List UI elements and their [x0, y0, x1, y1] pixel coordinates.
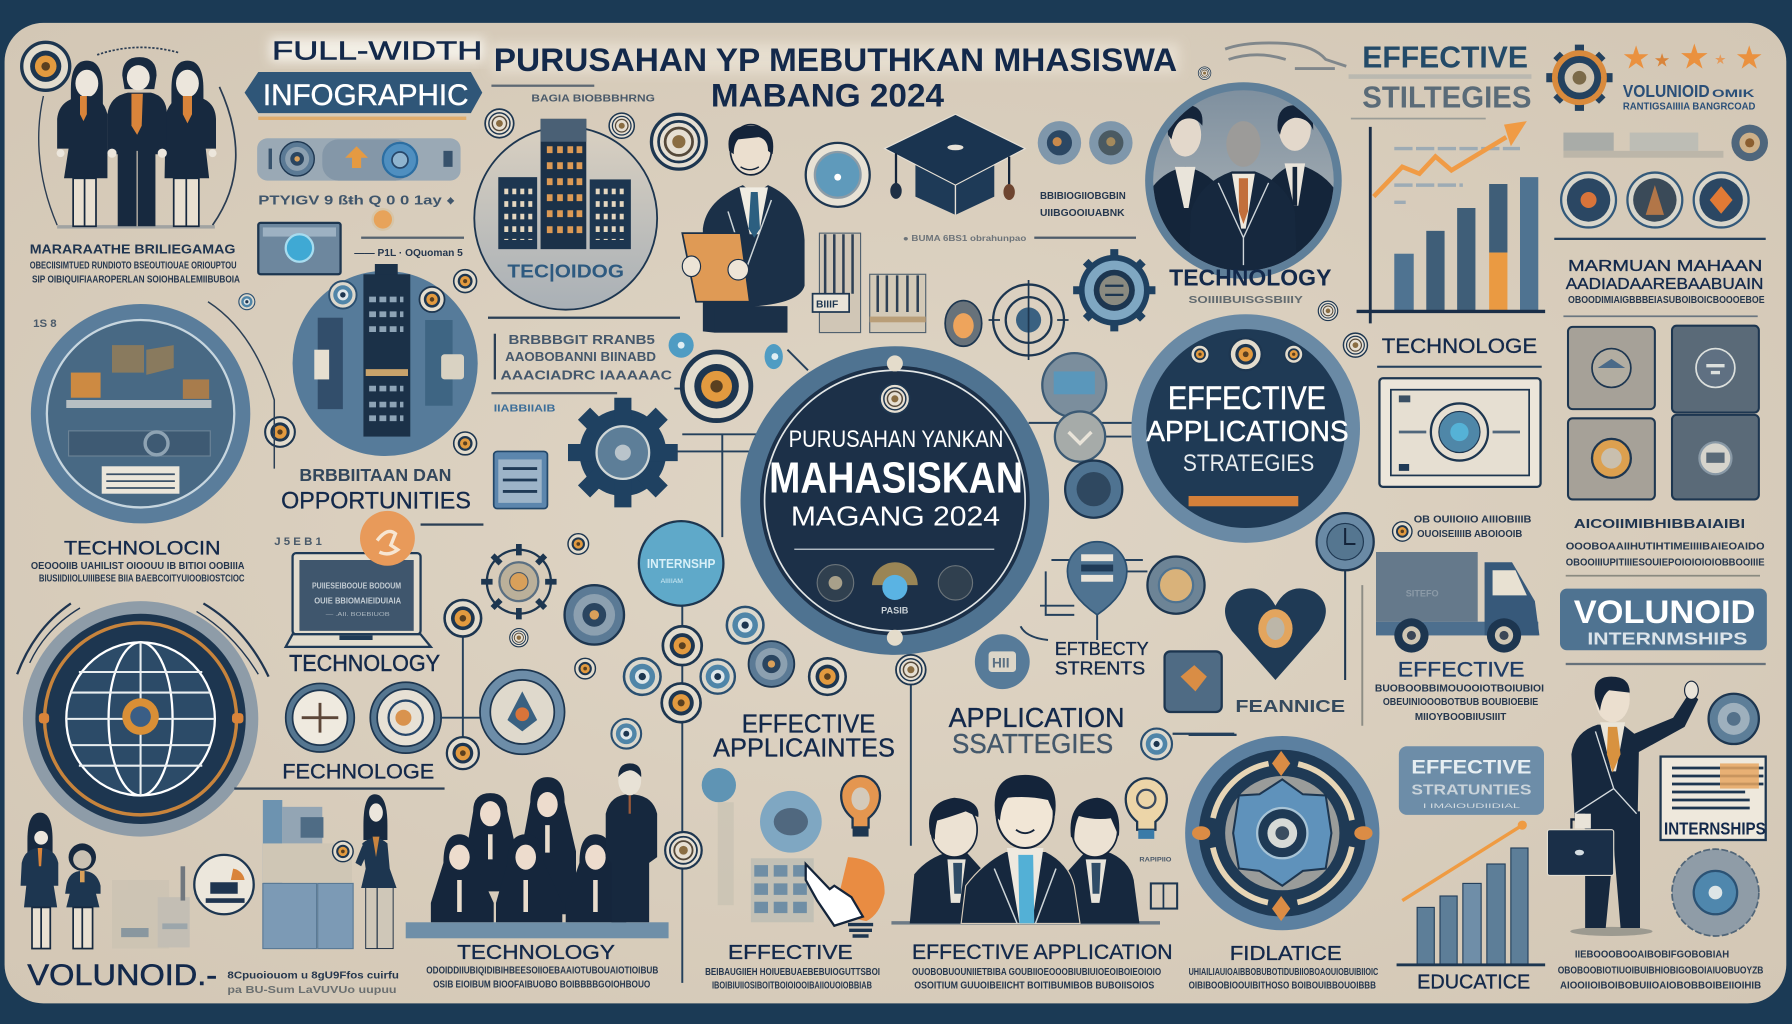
laptop: [286, 553, 431, 647]
orange bulb: [841, 776, 880, 837]
stars: ★: [1654, 49, 1670, 70]
internships document: [1661, 757, 1766, 840]
text block right: OBOODIMIAIGBBBEIASUBOIBOICBOOOEBOE: [1568, 295, 1765, 306]
volunoid caption top right: RANTIGSAIIIIA BANGRCOAD: [1623, 102, 1755, 113]
globe emblem: [17, 601, 269, 837]
heading: opportunities: OPPORTUNITIES: [281, 488, 471, 515]
heading: effective bottom: [705, 941, 880, 992]
twin badges and caption: [1034, 121, 1136, 239]
left man: [910, 798, 986, 923]
internships document: INTERNSHIPS: [1664, 818, 1766, 838]
laptop: OUIE BBIOMAIEIDUIAIA: [314, 596, 401, 605]
heading: technology team: SOIIIIBUISGSBIIIY: [1189, 295, 1303, 306]
building circle: TEC|OIDOG: [507, 261, 624, 282]
caption with rule: —— P1L · OQuoman 5: [354, 248, 463, 259]
barcodes: BIIIF: [816, 299, 838, 310]
compass gear: [480, 670, 565, 754]
camera panel: [1379, 378, 1541, 487]
heading: fidlatice: FIDLATICE: [1230, 942, 1342, 965]
bar chart top right: [1357, 121, 1545, 323]
target ring: [989, 280, 1069, 360]
ring orange large: [682, 352, 751, 421]
heading: effective application: OSOITIUM GUUOIBEIICHT BOITIBUMIBOB BUBOIISOIOS: [914, 981, 1154, 992]
heading: opportunities: BRBBIITAAN DAN: [299, 465, 451, 485]
hand on orange bulb: [806, 857, 885, 936]
centre man: [961, 775, 1080, 923]
caption rule near title: BAGIA BIOBBBHRNG: [531, 94, 655, 105]
women group: [406, 763, 669, 938]
text block bottom right: IIEBOOOBOOAIBOBIFGOBOBIAH: [1575, 950, 1729, 961]
main title: MABANG 2024: [711, 77, 944, 113]
blue ring: [806, 143, 870, 207]
volunoid caption top right: VOLUNIOID: [1623, 81, 1710, 101]
connectors around centre: [440, 350, 1362, 983]
caption near ball: J 5 E B 1: [274, 536, 322, 548]
heading: eftbecty strents: [1055, 638, 1149, 678]
blue dots: [669, 333, 783, 369]
icon strip: [257, 138, 461, 181]
heading: effective applicaintes: EFFECTIVE: [742, 709, 875, 739]
badge circle: HII: [992, 655, 1010, 670]
text block right: [1563, 258, 1765, 317]
faded machinery: [112, 866, 190, 949]
heading: effective truck: EFFECTIVE: [1398, 657, 1525, 682]
heading: fechnologe: FECHNOLOGE: [282, 758, 434, 783]
heading: volunoid footer: VOLUNOID.-: [27, 959, 217, 992]
small notes: [1139, 857, 1177, 909]
heading: volunoid footer: pa BU-Sum LaVUVUo uupuu: [227, 985, 397, 996]
heading: technology laptop: TECHNOLOGY: [289, 650, 440, 676]
heading: technology left: BIUSIIDIIOLUIIIBESE BIIA BAEBCOITYUIOOBIOSTCIOC: [39, 574, 245, 585]
heart: [1225, 588, 1326, 680]
stars: ★: [1714, 52, 1727, 67]
heading: technologe: TECHNOLOGE: [1382, 333, 1537, 358]
heading: technology bottom: ODOIDDIIUBIQIDIBIHBEESOIIOEBAAIOTUBOUAIOTIOIBUB: [426, 966, 658, 977]
gear outline: [481, 544, 557, 619]
text block middle left: BRBBBGIT RRANB5: [509, 333, 655, 347]
effective applications circle: [1131, 314, 1360, 543]
heading: educatice: EDUCATICE: [1417, 971, 1530, 994]
text block top left: OBECIISIMTUED RUNDIOTO BSEOUTIOUAE ORIOUPTOU: [30, 261, 237, 272]
heading: application strategies: APPLICATION: [949, 702, 1125, 733]
central emblem: MAHASISKAN: [769, 455, 1023, 503]
arcs left of tower: [208, 302, 274, 469]
caption with rule: [354, 237, 464, 259]
heading: effective truck: MIIOYBOOBIIUSIIIT: [1415, 712, 1507, 723]
right man: [1065, 798, 1139, 923]
text block top left: [30, 243, 240, 285]
badge: effective strategies: EFFECTIVE: [1411, 757, 1531, 779]
applicant icons: [702, 768, 822, 922]
medals by tower: [265, 270, 477, 455]
central emblem: PURUSAHAN YANKAN: [789, 426, 1003, 453]
effective applications circle: EFFECTIVE: [1168, 380, 1326, 416]
man centre: [107, 57, 167, 226]
caption above truck: OUOISEIIIIB ABOIOOIB: [1417, 529, 1522, 540]
small document icon: [494, 451, 547, 509]
effective applications circle: APPLICATIONS: [1146, 416, 1349, 448]
badge circle: [975, 634, 1030, 689]
text block right: MARMUAN MAHAAN: [1568, 258, 1762, 275]
heading: full-width infographic banner: [245, 35, 485, 120]
heading: technology left: OEOOOIIB UAHILIST OIOOUU IB BITIOI OOBIIIA: [31, 561, 245, 572]
medals near building: [485, 109, 706, 169]
heading: opportunities: [281, 465, 471, 515]
faint caption: ● BUMA 6BS1 obrahunpao: [903, 234, 1026, 243]
heading: volunoid footer: [27, 959, 399, 996]
small caption row: PTYIGV 9 ßŧh Q 0 0 1ay ♦: [258, 194, 455, 208]
heading: effective application: [912, 939, 1173, 992]
text block middle left: IIABBIIAIB: [494, 403, 555, 414]
man at end of group: [606, 763, 657, 922]
heading: effective bottom: BEIBAUGIIEH HOIUEBUAEBEBUIOGUTTSBOI: [705, 967, 880, 978]
heading: effective applicaintes: [713, 709, 895, 763]
tower circle: [293, 264, 478, 456]
twin rings: [286, 682, 441, 753]
heading: technologe: [1318, 301, 1542, 368]
medal top left: [22, 42, 70, 90]
heading: effective applicaintes: APPLICAINTES: [713, 733, 895, 763]
three circular icons: [1561, 173, 1749, 227]
heading: technology team: TECHNOLOGY: [1169, 265, 1331, 291]
caption above truck: [1393, 514, 1531, 541]
building circle: [474, 119, 657, 310]
connector medal rings around centre: INTERNSHP: [647, 557, 715, 571]
small medal: [1198, 67, 1211, 79]
laptop: PUIIESEIBOOUE BODOUM: [312, 582, 401, 591]
volunoid caption top right: [1623, 81, 1755, 113]
light bulb: [1126, 778, 1167, 839]
small icon: orange drop: [239, 294, 255, 310]
stars: ★: [1679, 39, 1710, 77]
text block right middle: OOOBOAAIIHUTIHTIMEIIIIBAIEOAIDO: [1566, 542, 1765, 553]
main title: [491, 42, 1179, 113]
central emblem: [741, 346, 1049, 655]
rule under technologe: [234, 787, 445, 790]
bar chart bottom right: [1397, 821, 1545, 966]
icon: orange ball: [360, 511, 415, 566]
heading: technology team: [1169, 265, 1331, 306]
heading: full-width infographic banner: INFOGRAPHIC: [263, 79, 469, 112]
main title: PURUSAHAN YP MEBUTHKAN MHASISWA: [494, 42, 1177, 78]
woman right: [165, 61, 217, 226]
clock ring with stem: [1317, 513, 1374, 680]
heading: volunoid footer: 8Cpuoiouom u 8gU9Ffos cuirfu: [227, 970, 399, 981]
gray band with medal: [1563, 125, 1768, 161]
faint car graphic: [1225, 43, 1346, 69]
heading: eftbecty strents: EFTBECTY: [1055, 638, 1149, 659]
text block right middle: OBOOIIIUPITIIIESOUIEPOIOIOIOIOBBOOIIIE: [1566, 558, 1765, 569]
twin badges and caption: UIIBGOOIUABNK: [1040, 208, 1125, 219]
volunoid caption top right: OMIK: [1712, 88, 1755, 100]
barcodes: [813, 233, 926, 333]
ring right of presenter: [1709, 694, 1759, 744]
orange medal: [945, 301, 982, 346]
heading: application strategies: [949, 702, 1125, 759]
heading: application strategies: SSATTEGIES: [952, 728, 1113, 759]
banner: volunoid internships: [1560, 589, 1767, 650]
woman bottom left 2: [65, 843, 101, 949]
heading: eftbecty strents: STRENTS: [1055, 657, 1145, 678]
node: right side rings: [1042, 353, 1122, 518]
text block top left: MARARAATHE BRILIEGAMAG: [30, 243, 235, 257]
heading: effective bottom: IBOIBIUIIOSIBOITBOIOIOOIBAIIOUOIOBBIAB: [712, 981, 872, 992]
heading: technology bottom: TECHNOLOGY: [457, 941, 615, 964]
tile with orange box: [1165, 651, 1222, 712]
badge: effective strategies: [1399, 746, 1544, 815]
badge: effective strategies: I IMAIOUDIIDIAL: [1423, 803, 1520, 810]
people group top left: [39, 47, 236, 229]
four tiles: [1568, 326, 1759, 499]
text block middle left: [488, 317, 680, 414]
stars: [1622, 39, 1764, 77]
large left circle: [31, 304, 250, 523]
banner: volunoid internships: INTERNMSHIPS: [1587, 629, 1747, 649]
banner: volunoid internships: VOLUNOID: [1574, 594, 1755, 630]
badge: effective strategies: STRATUNTIES: [1411, 782, 1532, 798]
connector to medal: [1173, 733, 1234, 735]
stars: ★: [1622, 40, 1650, 76]
gear circle bottom right: [1185, 736, 1379, 930]
cabinet: [263, 800, 353, 949]
woman left: [57, 61, 107, 226]
businessman with clipboard: [682, 125, 805, 333]
heading: fidlatice: OIBIBOOBIOOUIBITHOSO BOIBOUIBBOUOIBBB: [1189, 981, 1376, 992]
screen with blue light: [258, 223, 341, 274]
text block right middle: [1566, 517, 1765, 577]
text block middle left: AAOBOBANNI BIINABD: [505, 350, 656, 364]
graduation cap: [885, 114, 1025, 215]
text block right: AADIADAAREBAABUAIN: [1566, 276, 1763, 293]
caption above truck: OB OUIIOIIO AIIIOBIIIB: [1414, 514, 1531, 525]
central emblem: MAGANG 2024: [791, 501, 1000, 532]
node rings column: [445, 534, 926, 869]
orange gear emblem: [1546, 45, 1613, 111]
heading: effective strategies: [1349, 39, 1531, 119]
heading: effective application: EFFECTIVE APPLICATION: [912, 939, 1173, 964]
heading: effective truck: [1375, 657, 1544, 723]
presenter man: [1547, 677, 1698, 936]
text block top left: SIP OIBIQUIFIAAROPERLAN SOIOHBALEMIIBUBOIA: [32, 274, 240, 285]
team circle: [1143, 82, 1343, 279]
rule: [1566, 663, 1766, 665]
gear bottom right: [1672, 849, 1759, 936]
small notes: RAPIPIIO: [1139, 857, 1172, 864]
text block bottom right: AIOOIIOIBOIBOBUIIOAIOBOBBOIBEIIOIHIB: [1560, 981, 1761, 992]
heading: technology bottom: [426, 941, 658, 990]
small numerals: 1S 8: [33, 318, 57, 330]
heading: effective application: OUOBOBUOUNIIETBIBA GOUBIIOEOOOBIUBIUIOEOIBOIEOIOIO: [912, 967, 1161, 978]
truck: [1376, 552, 1539, 653]
heading: technology bottom: OSIB EIOIBUM BIOOFAIBUOBO BOIBBBBGOIOHBOUO: [433, 979, 650, 990]
heading: technology left: TECHNOLOCIN: [64, 537, 221, 559]
heading: effective truck: BUOBOOBBIMOUOOIOTBOIUBIOI: [1375, 683, 1544, 694]
heading: effective strategies: STILTEGIES: [1362, 79, 1531, 114]
heading: fidlatice: [1189, 942, 1379, 992]
stars: ★: [1735, 40, 1764, 76]
central emblem: PASIB: [881, 606, 909, 616]
heading: full-width infographic banner: FULL-WIDTH: [272, 35, 482, 65]
laptop: — .AII. BOEBIUOB: [326, 612, 390, 618]
pin and ring: [1067, 542, 1205, 615]
heading: feannice: FEANNICE: [1235, 696, 1345, 716]
small eye medal: [1141, 729, 1172, 759]
connector medal rings around centre: AIIIIAM: [661, 578, 683, 585]
text block right middle: AICOIIMIBHIBBAIAIBI: [1574, 517, 1745, 531]
twin badges and caption: BBIBIOGIIOBGBIN: [1040, 191, 1126, 202]
heading: effective bottom: EFFECTIVE: [728, 941, 853, 964]
effective applications circle: STRATEGIES: [1183, 450, 1314, 477]
rule: [1189, 734, 1237, 736]
woman presenter: [355, 794, 397, 949]
three businessmen: [891, 775, 1160, 925]
text block middle left: AAACIADRC IAAAAAC: [501, 368, 672, 382]
heading: effective truck: OBEUINIOOOBOTBUB BOUBIOEBIE: [1383, 697, 1538, 708]
round icon bottom left: [194, 855, 254, 914]
connector medal rings around centre: [639, 521, 723, 606]
text block bottom right: [1558, 950, 1763, 992]
gear blue: [1073, 249, 1155, 331]
rule: [1554, 238, 1766, 240]
truck: SITEFO: [1406, 589, 1439, 599]
heading: fidlatice: UHIAILIAUIOAIBBOBUBOTIDUBIIOBOAOUIOBUIBIIOIC: [1189, 967, 1379, 978]
dark gear: [568, 398, 678, 507]
icon: orange dot: [373, 209, 393, 230]
woman bottom left 1: [21, 813, 58, 949]
heading: technology left: [31, 537, 245, 585]
heading: effective strategies: EFFECTIVE: [1362, 39, 1528, 74]
